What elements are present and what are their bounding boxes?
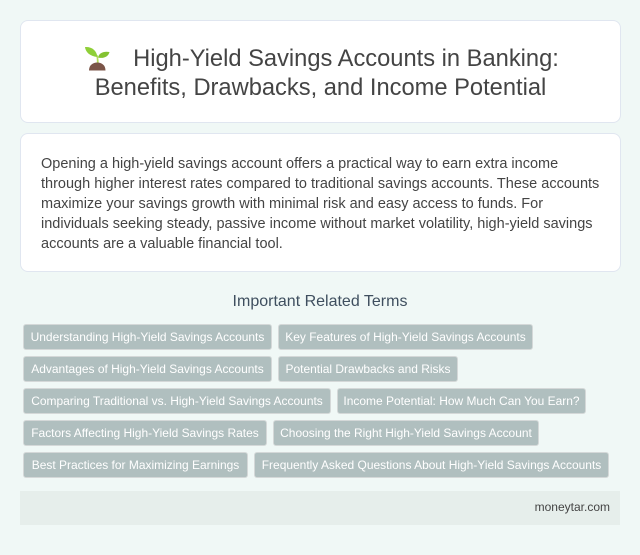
- tag: [273, 420, 539, 446]
- tag: [23, 420, 267, 446]
- tag: [23, 452, 248, 478]
- footer source text: moneytar.com: [535, 500, 610, 514]
- intro paragraph: [41, 156, 599, 252]
- tag: Comparing Traditional vs. High-Yield Savings Accounts: [31, 394, 323, 408]
- tag: Understanding High-Yield Savings Accounts: [31, 330, 264, 344]
- title line 2: Benefits, Drawbacks, and Income Potential: [95, 75, 546, 101]
- tag: Potential Drawbacks and Risks: [286, 362, 450, 376]
- tag: Key Features of High-Yield Savings Accounts: [285, 330, 526, 344]
- tag: Income Potential: How Much Can You Earn?: [343, 394, 580, 408]
- tag: [23, 356, 272, 382]
- tag: [23, 324, 272, 350]
- footer bar: [20, 491, 620, 525]
- tag: [278, 324, 533, 350]
- tag: [23, 388, 331, 414]
- intro paragraph: individuals seeking steady, passive income without market volatility, high-yield savings: [41, 216, 593, 232]
- panel: intro text card: [20, 133, 621, 272]
- panel: title card: [20, 20, 621, 123]
- tag: [278, 356, 458, 382]
- icon: sprout: [85, 47, 110, 70]
- intro paragraph: Opening a high-yield savings account offers a practical way to earn extra income: [41, 156, 558, 172]
- tag: Frequently Asked Questions About High-Yield Savings Accounts: [262, 458, 601, 472]
- panel: related term tags: [23, 324, 609, 478]
- intro paragraph: accounts are a valuable financial tool.: [41, 236, 283, 252]
- tag: [254, 452, 609, 478]
- tag: [337, 388, 586, 414]
- tag: Choosing the Right High-Yield Savings Account: [280, 426, 532, 440]
- intro paragraph: through higher interest rates compared to traditional savings accounts. These accounts: [41, 176, 599, 192]
- intro paragraph: maximize your savings growth with minimal risk and easy access to funds. For: [41, 196, 543, 212]
- tag: Best Practices for Maximizing Earnings: [32, 458, 239, 472]
- title line 1: High-Yield Savings Accounts in Banking:: [133, 46, 559, 72]
- tag: Factors Affecting High-Yield Savings Rates: [31, 426, 259, 440]
- tag: Advantages of High-Yield Savings Accounts: [31, 362, 264, 376]
- heading: important related terms: Important Related Terms: [233, 293, 407, 310]
